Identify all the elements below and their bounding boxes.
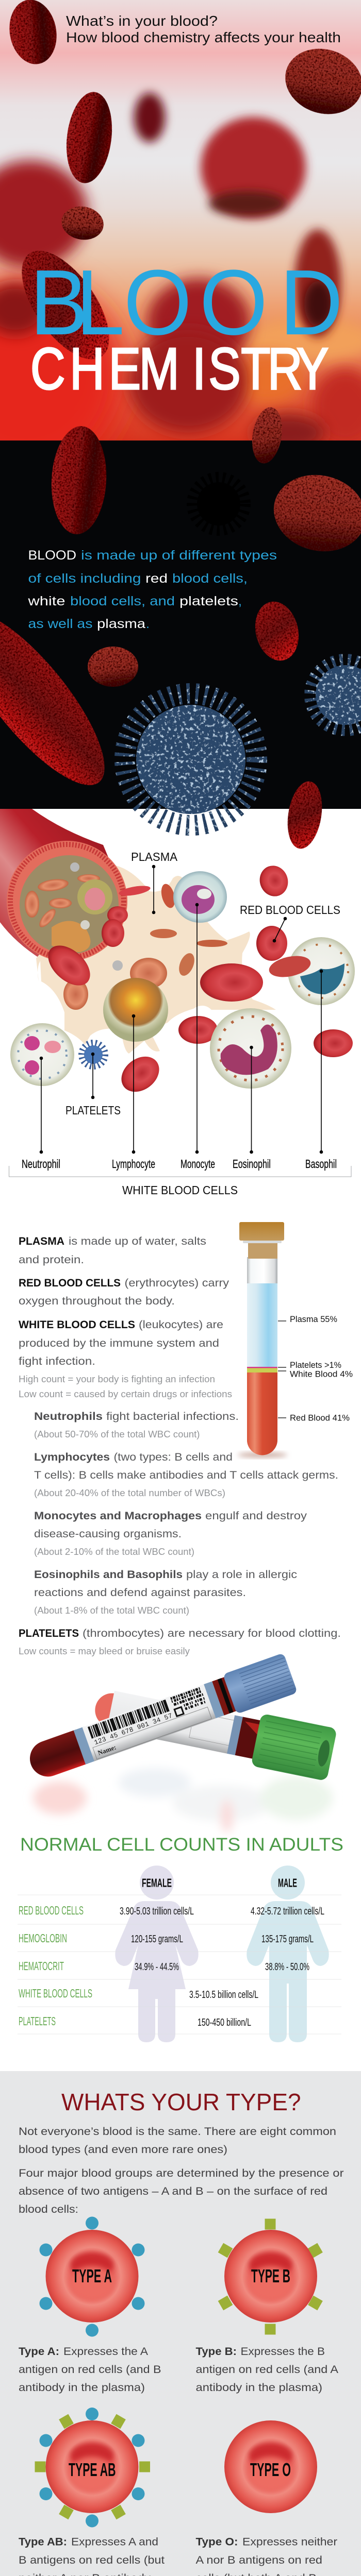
text block: plasma and cells: produced by the immune system and (19, 1337, 219, 1349)
text: type A (19, 2346, 161, 2394)
title: CHEMISTRY: CHEMISTRY (30, 336, 329, 402)
table values: 135-175 grams/L (261, 1934, 314, 1945)
text: type O (196, 2536, 343, 2576)
icon: vessel cross-section (7, 841, 127, 961)
text: type AB (19, 2536, 165, 2576)
icon: male figure (247, 1866, 329, 2042)
icon: large red cell behind BLOOD (22, 250, 109, 360)
column headers: FEMALE (142, 1876, 172, 1890)
label: platelets percent: Platelets >1% (290, 1360, 341, 1370)
icon: monocyte (173, 871, 227, 923)
text: blood intro: . (146, 617, 150, 631)
icon: red cell crossing black edge (283, 779, 326, 851)
text: type AB: B antigens on red cells (but (19, 2554, 165, 2566)
text block: plasma and cells: WHITE BLOOD CELLS (19, 1319, 135, 1331)
intro text: Four major blood groups are determined by the presence or (19, 2167, 344, 2179)
text block: plasma and cells: engulf and destroy (205, 1510, 307, 1522)
labels: white blood cell types: Neutrophil (22, 1157, 60, 1171)
icon: female figure (115, 1866, 199, 2042)
text block: plasma and cells: (About 1-8% of the total WBC count) (34, 1605, 189, 1616)
row labels: HEMATOCRIT (19, 1959, 64, 1973)
label: white blood percent: White Blood 4% (290, 1369, 353, 1379)
icon: type A cell (39, 2216, 144, 2337)
labels: white blood cell types (22, 1157, 337, 1171)
text block: plasma and cells: oxygen throughout the body. (19, 1295, 175, 1307)
text: blood intro: blood cells, (172, 571, 248, 586)
labels: white blood cell types: Eosinophil (233, 1157, 271, 1171)
panel: blood vessel diagram background (0, 809, 355, 1099)
icon: platelet (81, 1043, 105, 1066)
column headers: MALE (278, 1876, 297, 1890)
QR code (171, 1688, 207, 1716)
icon: red cells in plasma (41, 862, 353, 1099)
chart: test tube composition (238, 1222, 353, 1458)
intro text (19, 2126, 344, 2215)
text block: plasma and cells: and protein. (19, 1254, 84, 1266)
panel: what's your type (0, 2071, 361, 2576)
text: type B: Expresses the B (240, 2346, 325, 2358)
heading: normal cell counts: NORMAL CELL COUNTS IN ADULTS (20, 1835, 343, 1855)
title: What's in your blood (66, 13, 341, 45)
title: What's in your blood: What’s in your blood? (66, 13, 218, 29)
tube reflections (33, 1768, 333, 1833)
text block: plasma and cells: (leukocytes) are (139, 1319, 223, 1331)
icon: white blood cell corner (311, 661, 361, 729)
labels: white blood cell types: Lymphocyte (112, 1157, 155, 1171)
text block: plasma and cells: Monocytes and Macrophages (34, 1510, 202, 1522)
icon: small red cell (61, 206, 104, 240)
icon: plasma spill (36, 866, 276, 1054)
intro text: Not everyone’s blood is the same. There are eight common (19, 2126, 336, 2138)
text block: plasma and cells: fight bacterial infections. (106, 1411, 239, 1422)
text block: plasma and cells: PLATELETS (19, 1628, 79, 1639)
text block: plasma and cells (19, 1235, 341, 1656)
text: blood intro: platelets (179, 594, 238, 608)
text block: plasma and cells: play a role in allergic (186, 1569, 297, 1581)
text block: plasma and cells: T cells): B cells make antibodies and T cells attack germs. (34, 1469, 338, 1481)
text: blood intro: red (145, 571, 168, 586)
text block: plasma and cells: (About 50-70% of the total WBC count) (34, 1429, 200, 1439)
label: red blood percent: Red Blood 41% (290, 1413, 350, 1423)
table values: 120-155 grams/L (131, 1934, 183, 1945)
panel: black section (0, 440, 361, 809)
icon: eosinophil (210, 1008, 291, 1089)
text block: plasma and cells: Low counts = may bleed or bruise easily (19, 1646, 190, 1656)
icon: blood vessel (0, 809, 129, 959)
text: type B (196, 2346, 338, 2394)
icon: red cell lower right (250, 597, 304, 665)
icon: red cell crossing hero edge (249, 405, 286, 466)
labels: white blood cell types: Basophil (305, 1157, 337, 1171)
chart: normal cell counts table (18, 1866, 341, 2042)
icon: type B cell: TYPE B (251, 2265, 290, 2286)
text block: plasma and cells: (About 20-40% of the total number of WBCs) (34, 1488, 225, 1498)
table values: 3.90-5.03 trillion cells/L (120, 1906, 194, 1917)
icon: type O cell (224, 2420, 317, 2513)
panel: hero gradient with blood cells (0, 0, 361, 474)
text: type AB: Type AB: (19, 2536, 67, 2548)
text: blood intro: of cells including (28, 571, 141, 586)
label: PLASMA: PLASMA (131, 850, 178, 863)
text: type B: antigen on red cells (and A (196, 2364, 338, 2376)
intro text: absence of two antigens – A and B – on the surface of red (19, 2185, 327, 2197)
icon: white blood cell large (125, 693, 257, 825)
title: What's in your blood: How blood chemistry affects your health (66, 29, 341, 45)
icon: type O cell: TYPE O (250, 2459, 291, 2480)
text: type O: Type O: (196, 2536, 238, 2548)
text: blood intro: , (238, 594, 242, 608)
table values: 3.5-10.5 billion cells/L (189, 1989, 258, 2001)
text: type A: Type A: (19, 2346, 59, 2358)
text block: plasma and cells: Lymphocytes (34, 1451, 110, 1463)
text block: plasma and cells: (two types: B cells and (113, 1451, 233, 1463)
text: blood intro: blood cells, and (70, 594, 175, 608)
text block: plasma and cells: (thrombocytes) are necessary for blood clotting. (83, 1628, 341, 1639)
icon: dark white-cell silhouette (194, 480, 243, 528)
icon: basophil (267, 937, 355, 1005)
row labels: PLATELETS (19, 2014, 56, 2028)
row labels: RED BLOOD CELLS (19, 1904, 84, 1917)
icon: type B cell (218, 2218, 323, 2335)
barcode (90, 1705, 168, 1733)
icon: huge red cell (0, 591, 127, 805)
leader lines (40, 866, 323, 1153)
text block: plasma and cells: Neutrophils (34, 1411, 103, 1422)
text block: plasma and cells: (erythrocytes) carry (125, 1277, 229, 1289)
row labels: HEMOGLOBIN (19, 1931, 67, 1945)
icon: lymphocyte (103, 978, 168, 1042)
icon: red cell top left (9, 0, 57, 64)
text: type B: antibody in the plasma) (196, 2382, 322, 2394)
icon: red cell top right (285, 48, 361, 114)
text: type AB: Expresses A and (71, 2536, 158, 2548)
label: WHITE BLOOD CELLS: WHITE BLOOD CELLS (122, 1183, 238, 1197)
label: PLATELETS: PLATELETS (65, 1104, 121, 1117)
text block: plasma and cells: High count = your body is fighting an infection (19, 1374, 215, 1384)
table values (120, 1906, 324, 2028)
text: blood intro: white (27, 594, 65, 608)
icon: neutrophil (10, 1023, 74, 1086)
icon: red cell middle (66, 92, 112, 183)
blue-cap tube (24, 1653, 298, 1785)
icon: small grey platelets (70, 862, 123, 971)
icon: red cell small center (88, 647, 138, 687)
text block: plasma and cells: fight infection. (19, 1355, 95, 1367)
text block: plasma and cells: Low count = caused by certain drugs or infections (19, 1389, 232, 1399)
serial number: 123 45 678 901 34 57 (93, 1712, 173, 1747)
text block: plasma and cells: RED BLOOD CELLS (19, 1277, 121, 1289)
text: blood intro: is made up of different types (81, 548, 277, 563)
icon: type A cell: TYPE A (72, 2265, 112, 2286)
text block: plasma and cells: disease-causing organisms. (34, 1528, 182, 1540)
text block: plasma and cells: (About 2-10% of the total WBC count) (34, 1547, 194, 1557)
title: BLOOD: BLOOD (30, 251, 343, 354)
text: blood intro: plasma (97, 617, 145, 631)
text block: plasma and cells: Eosinophils and Basophils (34, 1569, 183, 1581)
row labels (19, 1904, 92, 2028)
text: type O: A nor B antigens on red (196, 2554, 322, 2566)
labels: white blood cell types: Monocyte (180, 1157, 215, 1171)
text: type O: Expresses neither (242, 2536, 337, 2548)
icon: blood sample tubes (24, 1653, 337, 1833)
text: blood intro (27, 548, 277, 631)
row labels: WHITE BLOOD CELLS (19, 1987, 92, 2000)
label: Name: Name: (97, 1743, 117, 1757)
table values: 34.9% - 44.5% (135, 1961, 179, 1973)
text block: plasma and cells: PLASMA (19, 1235, 64, 1247)
table values: 4.32-5.72 trillion cells/L (251, 1906, 324, 1917)
intro text: blood types (and even more rare ones) (19, 2144, 227, 2156)
icon: red cell tall (49, 425, 109, 536)
icon: red cell right (266, 465, 361, 561)
heading: WHATS YOUR TYPE? (61, 2089, 301, 2115)
icon: type AB cell (35, 2408, 150, 2528)
text block: plasma and cells: reactions and defend against parasites. (34, 1587, 246, 1599)
green-cap tube (90, 1681, 337, 1781)
text: type B: Type B: (196, 2346, 237, 2358)
text: blood intro: BLOOD (28, 548, 76, 563)
label: plasma percent: Plasma 55% (290, 1314, 337, 1324)
text: type A: antigen on red cells (and B (19, 2364, 161, 2376)
label: RED BLOOD CELLS: RED BLOOD CELLS (240, 903, 340, 917)
icon: type AB cell: TYPE AB (69, 2459, 116, 2480)
column headers (142, 1876, 297, 1890)
table values: 150-450 billion/L (198, 2017, 251, 2028)
icon: tube cork (239, 1222, 284, 1259)
text block: plasma and cells: is made up of water, salts (69, 1235, 206, 1247)
icon: tube body (247, 1257, 277, 1455)
text: type A: Expresses the A (63, 2346, 148, 2358)
intro text: blood cells: (19, 2204, 78, 2215)
text: type A: antibody in the plasma) (19, 2382, 145, 2394)
text: blood intro: as well as (28, 617, 93, 631)
table values: 38.8% - 50.0% (265, 1961, 309, 1973)
